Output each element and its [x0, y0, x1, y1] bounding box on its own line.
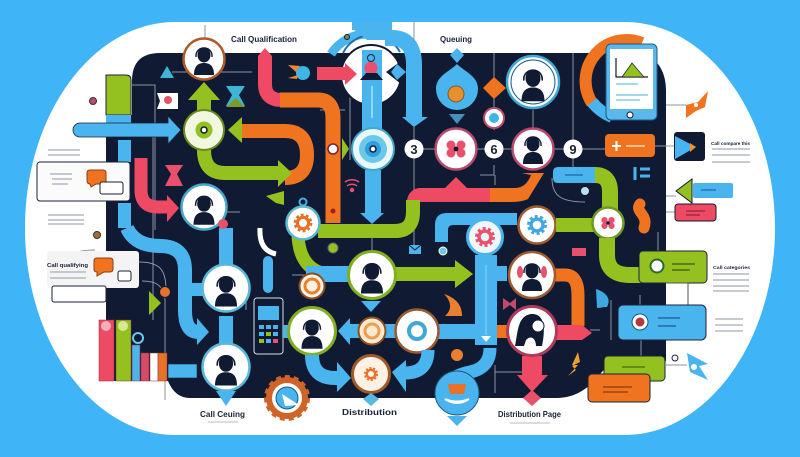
arrow: blue right	[73, 116, 181, 144]
arrow: red bend	[141, 158, 179, 222]
label: pink box	[675, 204, 716, 221]
calculator	[254, 298, 283, 354]
icon: small green dot	[328, 243, 338, 253]
arrow: blue curve from headset node	[312, 355, 351, 392]
node: person blue ring	[507, 56, 559, 108]
left block: green and blue	[106, 75, 131, 125]
heading: Distribution: Distribution	[342, 407, 397, 417]
label: blue triangle box	[676, 179, 733, 203]
arrow: green connector	[556, 218, 594, 232]
arrow: blue arc down	[385, 38, 428, 127]
blue vertical strips	[118, 140, 131, 228]
box: orange lower	[588, 374, 650, 402]
icon: teal dot	[439, 247, 447, 255]
icon: orange dot with ring	[160, 286, 170, 298]
node: number 3	[404, 140, 424, 158]
heading: Distribution Page: Distribution Page	[498, 410, 561, 419]
heading: Call Ceuing: Call Ceuing	[200, 409, 245, 419]
arrow: red pointing to top circle	[317, 63, 357, 85]
icon: small dots	[90, 98, 100, 238]
heading: Queuing: Queuing	[440, 35, 472, 44]
arrow: blue under green	[306, 266, 352, 282]
outline box	[52, 286, 106, 302]
icon: small list	[635, 167, 650, 180]
node: person teal ring	[182, 184, 226, 230]
node: queuing teardrop	[436, 48, 478, 124]
connector lines	[70, 20, 687, 400]
icon: big orange gear	[266, 376, 308, 420]
node: number 9: 9	[569, 142, 577, 157]
blue L path behind gear	[435, 213, 517, 242]
node: person teal ring left 1	[184, 38, 224, 80]
node: person headset green ring	[288, 308, 336, 354]
node: blue gear	[518, 206, 556, 244]
white gap connector	[666, 283, 688, 305]
node: pink flower	[436, 128, 476, 170]
callout: upper left	[37, 162, 130, 201]
triangle: blue below person	[361, 301, 381, 312]
icon: pink dot	[218, 219, 228, 229]
arrow: blue thick vertical lower	[360, 170, 384, 224]
node: number 3: 3	[410, 142, 418, 157]
callout: green	[639, 251, 707, 283]
blue connectors	[168, 228, 236, 406]
callout: lower left: Call qualifying	[47, 263, 88, 269]
arrow: green right	[392, 260, 473, 288]
arrow: blue thick vertical upper	[362, 80, 382, 130]
icon: lightning	[568, 352, 580, 376]
node: profile	[508, 306, 556, 356]
blue stub	[497, 266, 507, 281]
icon: pale dot	[581, 187, 589, 195]
icon: green triangle by target	[342, 138, 349, 160]
icon: orange diamond	[483, 77, 506, 99]
box: green lower	[604, 356, 665, 381]
node: number 6	[484, 140, 504, 158]
text: Call compare this: Call compare this	[711, 141, 750, 147]
node: blue target	[352, 128, 394, 170]
icon: orange chevron	[444, 294, 462, 316]
icon: small fish	[288, 65, 310, 80]
shape: orange S	[639, 204, 645, 228]
node: person cyan ring	[202, 264, 250, 312]
node: pink gear	[468, 220, 502, 254]
icon: green bow lower	[226, 98, 245, 107]
book stack	[99, 320, 167, 381]
icon: mail	[409, 245, 421, 254]
node: blue target brown ring	[396, 310, 438, 352]
grey text lines upper left	[48, 150, 84, 224]
icon: small dark dot	[672, 355, 678, 361]
icon: small pink target	[484, 108, 504, 128]
label: blue tab	[553, 167, 596, 183]
arrow: blue long curve	[127, 228, 209, 345]
arrow: green curve	[204, 150, 292, 187]
text: Call categories	[713, 265, 750, 291]
node: orange gear with ring	[286, 206, 320, 240]
arrow: orange bend right	[555, 275, 578, 326]
icon: orange dot	[451, 349, 463, 361]
icon: blue star	[687, 353, 708, 380]
icon: small target	[300, 198, 306, 206]
icon: blue diamond	[363, 393, 379, 406]
node: number 6: 6	[490, 142, 498, 157]
icon: pink bow right	[503, 298, 516, 310]
callout: blue	[618, 305, 706, 340]
top ring assembly	[331, 22, 415, 105]
grey lines right lower	[715, 319, 743, 331]
icon: phone handset	[260, 228, 276, 254]
node: person with red headset	[509, 252, 555, 298]
arrow: blue curve to teardrop	[452, 348, 490, 380]
button: orange plus	[605, 134, 655, 157]
callout: lower left	[47, 251, 139, 288]
arrow: red and orange long	[258, 48, 338, 223]
arrow: green up	[188, 82, 220, 112]
heading: Distribution Page	[498, 410, 561, 423]
text: Call compare this	[711, 141, 750, 162]
text: Call categories: Call categories	[713, 265, 750, 271]
node: pink flower green ring	[592, 208, 624, 238]
heading: Call Qualification: Call Qualification	[231, 35, 297, 44]
icon: half eye	[596, 289, 609, 308]
node: person pink ring	[512, 128, 554, 170]
arrow: red down	[517, 356, 548, 392]
icon: green tag	[266, 191, 284, 205]
triangle: green	[149, 291, 161, 315]
icon: teal bow	[226, 86, 245, 106]
node: green target	[184, 110, 224, 150]
node: teardrop boat	[435, 371, 479, 426]
orange stub	[497, 325, 508, 338]
dark flow panel	[99, 53, 666, 398]
icon: wifi	[345, 180, 359, 192]
node: number 9	[564, 140, 582, 158]
icon: orange flag	[686, 91, 708, 118]
arrow: blue curve left	[392, 350, 428, 392]
node: orange target small	[300, 274, 324, 298]
tablet with arc	[586, 40, 657, 120]
arrow: blue left towards headset node	[283, 318, 475, 345]
icon: pink bow	[165, 165, 183, 186]
icon: pink tag	[157, 93, 178, 109]
icon: pink small tag	[572, 248, 586, 256]
node: person lower	[202, 344, 250, 390]
arrow: green long	[318, 200, 413, 231]
arrow: green left drop	[298, 232, 322, 273]
arrow: red and orange middle	[407, 173, 544, 202]
node: person green ring	[348, 252, 396, 298]
pill: blue	[263, 256, 273, 293]
arrow: green upper right	[595, 175, 610, 212]
icon: play box	[674, 132, 705, 161]
node: orange gear	[352, 356, 390, 392]
arrow: blue vertical right	[475, 255, 497, 345]
arrow: orange loop	[228, 117, 307, 178]
icon: red diamond	[523, 390, 541, 406]
arrow: red right	[552, 325, 592, 340]
arrow: green to callout	[607, 238, 645, 275]
node: orange target middle	[358, 318, 386, 344]
icon: teal triangle	[160, 66, 174, 78]
